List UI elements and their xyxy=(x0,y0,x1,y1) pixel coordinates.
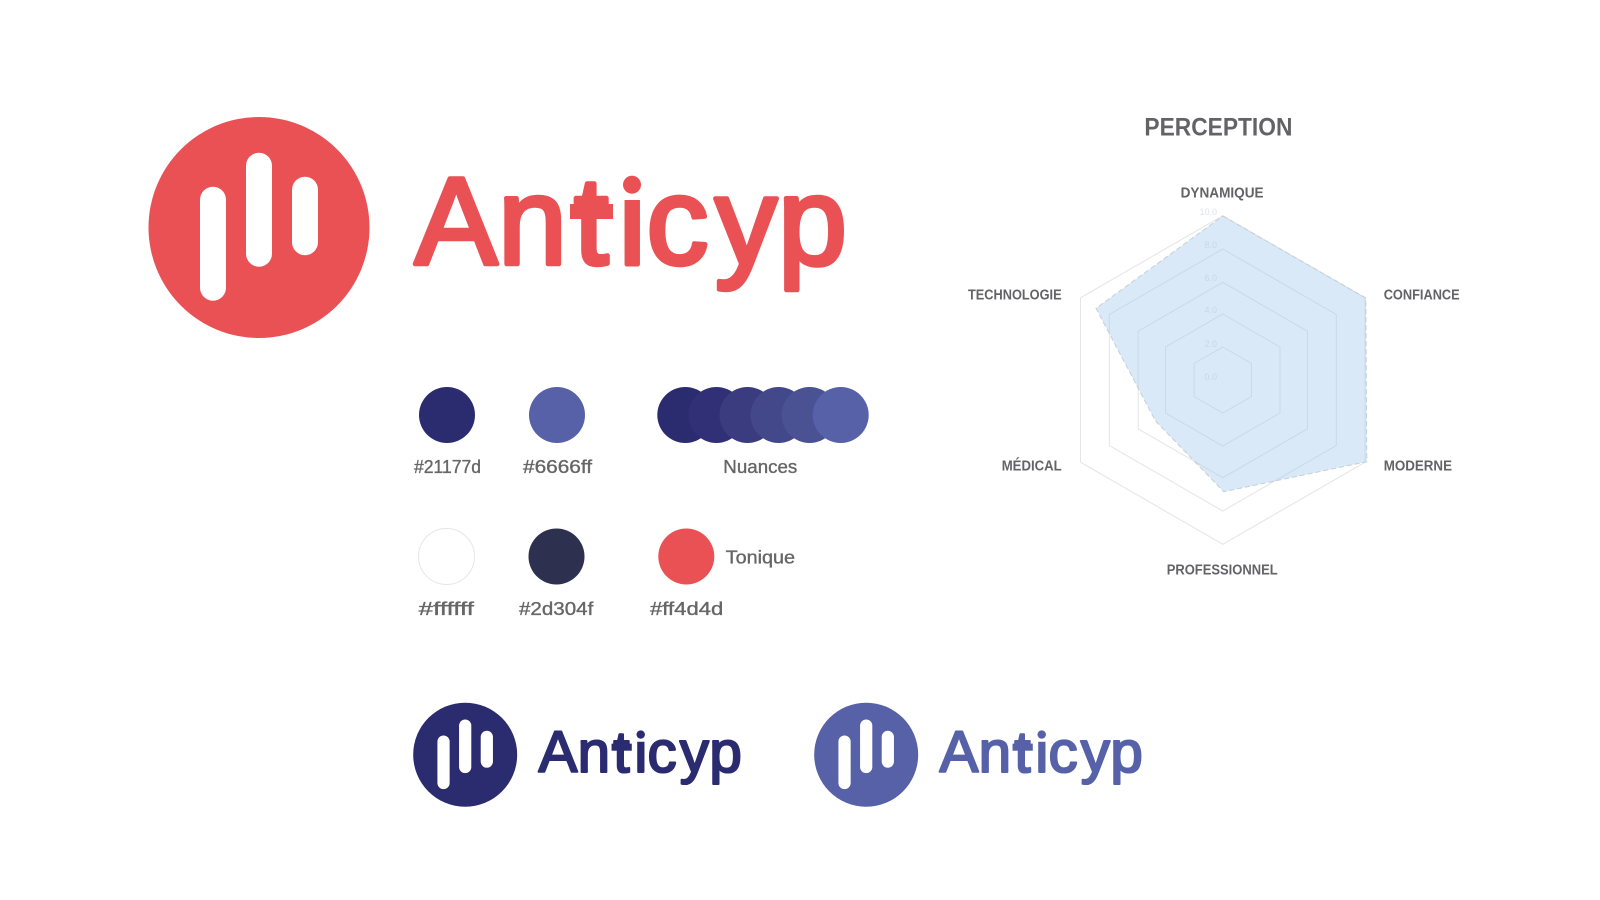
radar chart xyxy=(968,186,1460,578)
swatch: #6666ff xyxy=(523,387,593,477)
radar scale labels: 2.0 xyxy=(1204,339,1217,349)
radar scale labels: 8.0 xyxy=(1204,240,1217,250)
wordmark: navy: Anticyp xyxy=(539,720,742,785)
radar scale labels: 0.0 xyxy=(1204,372,1217,382)
radar scale labels: 10.0 xyxy=(1199,207,1217,217)
radar axis labels: PROFESSIONNEL xyxy=(1167,562,1278,578)
swatch: #21177d: #21177d xyxy=(414,457,481,477)
swatch: #ffffff: #ffffff xyxy=(419,599,475,619)
radar grid xyxy=(1080,216,1365,544)
radar axis labels: TECHNOLOGIE xyxy=(968,288,1062,304)
logo variant: periwinkle xyxy=(814,703,1143,807)
radar axis labels: MODERNE xyxy=(1384,458,1452,474)
radar scale labels: 4.0 xyxy=(1204,305,1217,315)
radar scale labels: 6.0 xyxy=(1204,273,1217,283)
icon: circle with three bars xyxy=(148,117,370,338)
perception heading: PERCEPTION xyxy=(1144,114,1292,142)
wordmark: Anticyp xyxy=(415,153,847,291)
swatch group: nuances: Nuances xyxy=(723,457,797,477)
swatch: #6666ff: #6666ff xyxy=(523,457,593,477)
radar data area xyxy=(1096,216,1367,492)
swatch: #2d304f xyxy=(519,528,594,619)
swatch: #2d304f: #2d304f xyxy=(519,599,594,619)
radar axis labels: DYNAMIQUE xyxy=(1181,186,1264,202)
colour palette xyxy=(414,387,869,619)
swatch: #21177d xyxy=(414,387,481,477)
radar scale labels xyxy=(1199,207,1217,382)
swatch: tonique #ff4d4d: Tonique xyxy=(726,548,795,568)
primary logo: coral xyxy=(148,117,847,338)
swatch: tonique #ff4d4d: #ff4d4d xyxy=(650,599,723,619)
swatch: tonique #ff4d4d xyxy=(650,528,795,619)
swatch: #ffffff xyxy=(418,528,475,619)
wordmark: periwinkle: Anticyp xyxy=(940,720,1143,785)
logo variant: navy xyxy=(413,703,742,807)
icon: periwinkle circle with bars xyxy=(814,703,918,807)
swatch group: nuances xyxy=(657,387,869,477)
icon: navy circle with bars xyxy=(413,703,517,807)
radar axis labels: MÉDICAL xyxy=(1002,458,1062,474)
radar axis labels xyxy=(968,186,1460,578)
radar axis labels: CONFIANCE xyxy=(1384,288,1460,304)
